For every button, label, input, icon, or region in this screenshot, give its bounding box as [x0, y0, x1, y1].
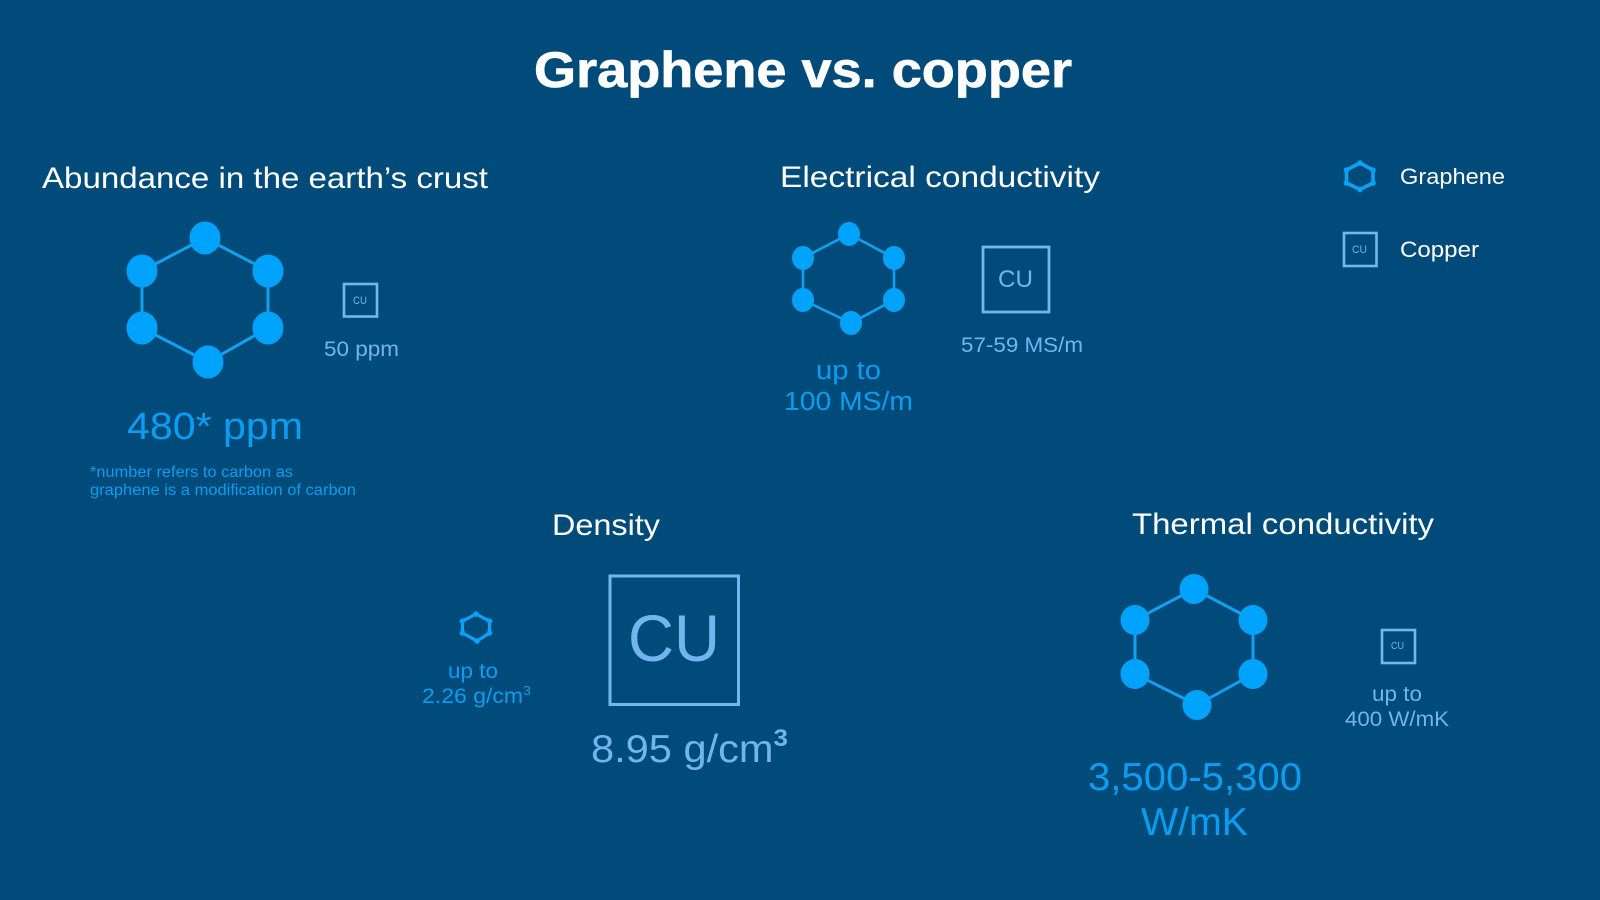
icon: medium graphene hexagon — [792, 222, 905, 335]
copper value: 3 — [774, 725, 788, 752]
graphene value: 480* ppm — [127, 406, 303, 448]
icon: medium copper box — [983, 247, 1049, 312]
icon: large graphene hexagon — [126, 222, 284, 378]
heading: electrical conductivity: Electrical conductivity — [780, 161, 1100, 194]
heading: density: Density — [552, 509, 660, 542]
copper value: 400 W/mK — [1345, 708, 1449, 731]
copper value: 50 ppm — [324, 338, 399, 361]
panel: abundance in the earth's crust — [42, 162, 488, 499]
heading: abundance: Abundance in the earth’s crust — [42, 162, 488, 195]
icon: large graphene hexagon — [1120, 574, 1268, 720]
heading: thermal conductivity: Thermal conductivity — [1132, 508, 1434, 541]
legend: copper — [1344, 233, 1479, 266]
legend: copper: Copper — [1400, 237, 1479, 262]
icon: small copper box: CU — [1391, 641, 1404, 652]
legend — [1344, 160, 1505, 266]
icon: large copper box — [610, 576, 738, 704]
graphene value: up to — [448, 660, 498, 683]
graphene value: up to — [816, 357, 881, 385]
panel: thermal conductivity — [1088, 508, 1449, 844]
graphene value: 100 MS/m — [784, 388, 913, 416]
icon: medium copper box: CU — [998, 266, 1033, 293]
graphene value — [1088, 756, 1302, 844]
icon: small copper box: CU — [353, 295, 367, 307]
title: Graphene vs. copper — [534, 42, 1072, 98]
copper value: up to — [1372, 683, 1422, 706]
graphene value: 3 — [523, 683, 531, 698]
legend: graphene: Graphene — [1400, 164, 1505, 189]
legend: graphene — [1344, 160, 1505, 192]
icon: large copper box: CU — [628, 601, 720, 675]
legend: copper: CU — [1352, 244, 1367, 256]
graphene value — [422, 660, 531, 708]
footnote — [90, 464, 356, 499]
graphene value: W/mK — [1141, 801, 1248, 844]
panel: density — [422, 509, 788, 771]
graphene value — [784, 357, 913, 416]
panel: electrical conductivity — [780, 161, 1100, 416]
icon: small copper box — [344, 284, 377, 316]
graphene value: 2.26 g/cm — [422, 685, 514, 708]
footnote: *number refers to carbon as — [90, 464, 293, 481]
footnote: graphene is a modification of carbon — [90, 482, 356, 499]
copper value: 57-59 MS/m — [961, 334, 1083, 357]
icon: small copper box — [1382, 630, 1415, 663]
graphene value: 3,500-5,300 — [1088, 756, 1302, 799]
icon: small graphene hexagon — [460, 611, 492, 644]
copper value: 8.95 g/cm — [591, 728, 760, 771]
copper value — [1345, 683, 1449, 731]
